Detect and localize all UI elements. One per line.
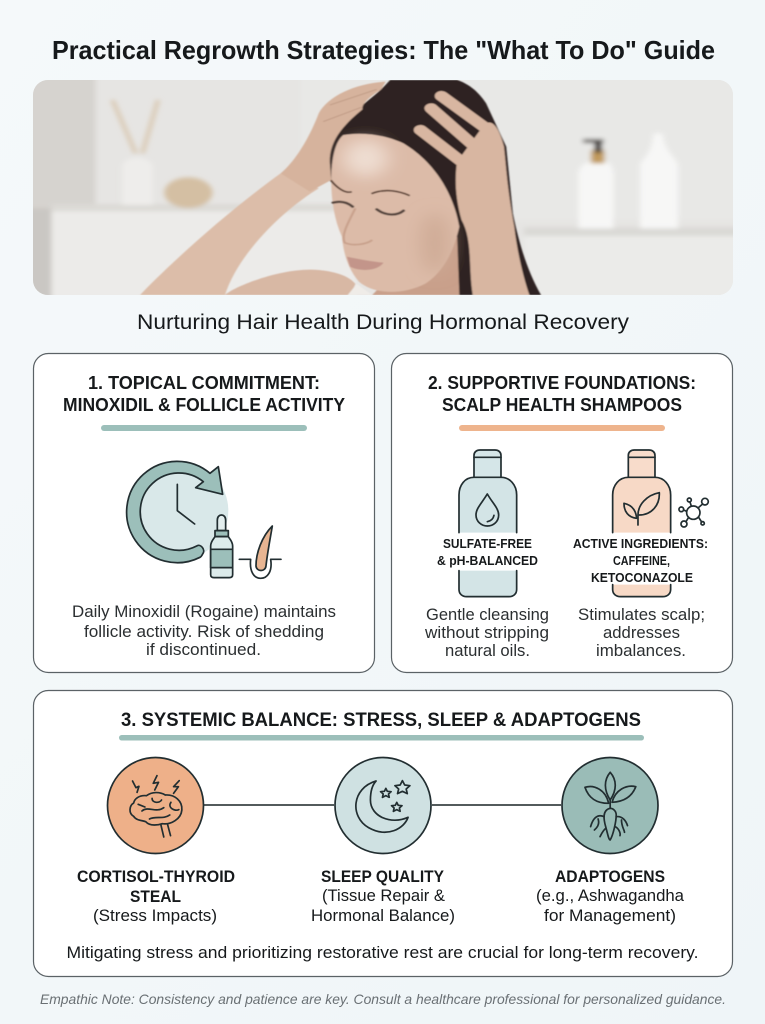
panel: supportive foundations xyxy=(392,354,732,672)
label: sulfate-free: & pH-BALANCED xyxy=(437,553,538,568)
label: cortisol-thyroid steal: STEAL xyxy=(130,888,181,906)
facial features xyxy=(331,181,409,195)
label: active ingredients xyxy=(573,536,708,585)
heading: panel 2: 2. SUPPORTIVE FOUNDATIONS: xyxy=(428,372,696,393)
text: panel 1 body: follicle activity. Risk of shedding xyxy=(84,623,324,641)
label: adaptogens xyxy=(536,868,685,925)
heading: panel 2: SCALP HEALTH SHAMPOOS xyxy=(442,394,682,415)
label: active ingredients: ACTIVE INGREDIENTS: xyxy=(573,536,708,551)
accent bar: panel 2 xyxy=(459,425,665,431)
hair back xyxy=(323,80,541,295)
heading: panel 1: 1. TOPICAL COMMITMENT: xyxy=(88,372,320,393)
text: panel 1 body xyxy=(72,603,336,659)
label: sleep quality xyxy=(311,868,455,925)
shoulder xyxy=(225,270,355,295)
label: cortisol-thyroid steal: CORTISOL-THYROID xyxy=(77,868,235,886)
text: active ingredient description: imbalances. xyxy=(596,642,686,660)
icon: sulfate-free bottle xyxy=(459,450,517,597)
label: sulfate-free: SULFATE-FREE xyxy=(443,536,532,551)
heading: panel 1: MINOXIDIL & FOLLICLE ACTIVITY xyxy=(63,394,346,415)
text: active ingredient description: addresses xyxy=(603,624,680,642)
accent bar: panel 3 xyxy=(119,735,644,740)
text: active ingredient description xyxy=(578,606,705,660)
text: panel 1 body: if discontinued. xyxy=(146,641,261,659)
text: sulfate-free description: natural oils. xyxy=(445,642,530,660)
face xyxy=(331,134,459,292)
text: sulfate-free description: Gentle cleansing xyxy=(426,606,549,624)
icon: stressed brain xyxy=(108,758,204,854)
label: cortisol-thyroid steal xyxy=(77,868,235,925)
footer note: Empathic Note: Consistency and patience are key. Consult a healthcare professional for personalized guidance. xyxy=(40,991,726,1007)
photo: woman massaging scalp xyxy=(24,73,743,303)
label: sleep quality: SLEEP QUALITY xyxy=(321,868,444,886)
title: Practical Regrowth Strategies: The "What To Do" Guide xyxy=(52,35,715,65)
text: panel 1 body: Daily Minoxidil (Rogaine) maintains xyxy=(72,603,336,621)
right arm and hand xyxy=(456,122,529,295)
icon: moon and stars xyxy=(335,758,431,854)
heading: panel 3: 3. SYSTEMIC BALANCE: STRESS, SLEEP & ADAPTOGENS xyxy=(121,710,641,731)
heading: panel 1 xyxy=(63,372,346,415)
text: active ingredient description: Stimulates scalp; xyxy=(578,606,705,624)
label: adaptogens: (e.g., Ashwagandha xyxy=(536,887,685,905)
text: sulfate-free description xyxy=(424,606,549,660)
text: sulfate-free description: without stripping xyxy=(424,624,549,642)
neck xyxy=(372,237,459,295)
label: sleep quality: Hormonal Balance) xyxy=(311,907,455,925)
label: sleep quality: (Tissue Repair & xyxy=(322,887,445,905)
subtitle: Nurturing Hair Health During Hormonal Recovery xyxy=(137,310,629,334)
label: adaptogens: ADAPTOGENS xyxy=(555,868,665,886)
panel: topical commitment xyxy=(34,354,374,672)
label: adaptogens: for Management) xyxy=(544,907,676,925)
icon: clock, dropper and follicle xyxy=(127,461,281,578)
panel: systemic balance xyxy=(34,690,732,976)
accent bar: panel 1 xyxy=(101,425,307,431)
label: active ingredients: KETOCONAZOLE xyxy=(591,570,693,585)
left arm and hand xyxy=(140,172,319,295)
icon: adaptogen root plant xyxy=(562,758,658,854)
text: panel 3 summary: Mitigating stress and prioritizing restorative rest are crucial for long-term recovery. xyxy=(66,943,698,962)
connector line xyxy=(204,804,561,806)
icon: molecule xyxy=(679,498,708,527)
heading: panel 2 xyxy=(428,372,696,415)
label: sulfate-free xyxy=(437,536,538,568)
icon: active ingredient bottle xyxy=(613,450,671,597)
label: cortisol-thyroid steal: (Stress Impacts) xyxy=(93,907,217,925)
label: active ingredients: CAFFEINE, xyxy=(613,553,670,568)
